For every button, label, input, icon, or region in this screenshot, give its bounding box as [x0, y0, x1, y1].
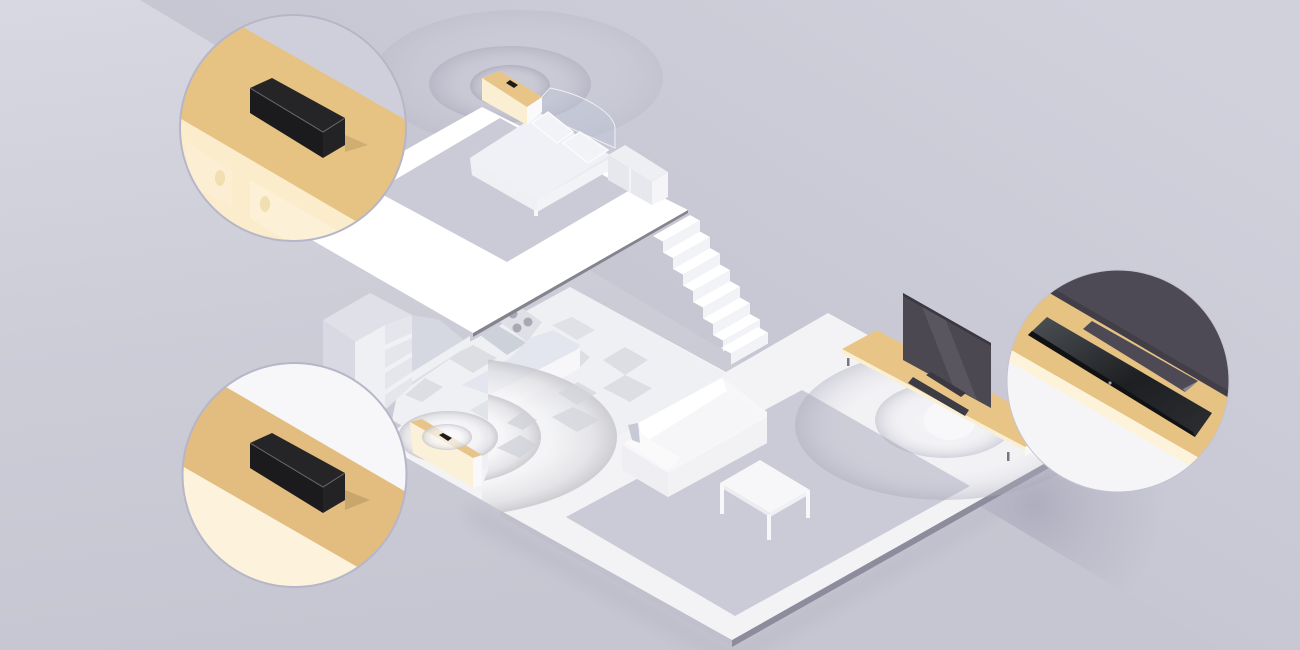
sound rings around TV stand — [795, 363, 1048, 500]
kitchen floor with checker tiles — [392, 287, 726, 470]
kitchen island with hob and sink — [462, 308, 595, 420]
bedroom dresser — [608, 145, 668, 205]
ground floor platform — [380, 287, 1072, 647]
glass headboard — [530, 88, 615, 148]
coffee table — [720, 460, 810, 540]
soundbar on stand — [908, 377, 969, 416]
TV — [903, 293, 991, 408]
stairs — [653, 215, 768, 365]
sound rings behind bedroom — [373, 10, 663, 146]
lower cabinet with speaker — [398, 411, 498, 488]
callout circle: kitchen speaker close-up — [182, 362, 408, 588]
sound rings around kitchen speaker — [482, 360, 617, 512]
kitchen back counter — [412, 315, 470, 385]
upper floor slab — [279, 107, 688, 337]
TV stand — [842, 330, 1060, 461]
callout circle: soundbar close-up — [1008, 270, 1228, 492]
background: shadow band beside platform — [981, 468, 1114, 566]
bed — [470, 112, 610, 216]
tall kitchen cupboard — [323, 293, 412, 410]
bedroom yellow cabinet with speaker — [482, 71, 542, 125]
sofa — [622, 378, 767, 497]
living room carpet — [566, 390, 970, 616]
ground floor soft shadow — [470, 500, 1000, 650]
callout circle: bedroom speaker close-up — [179, 14, 407, 242]
bedroom carpet — [376, 118, 630, 262]
floor tiles seen through the sound rings — [497, 382, 600, 458]
